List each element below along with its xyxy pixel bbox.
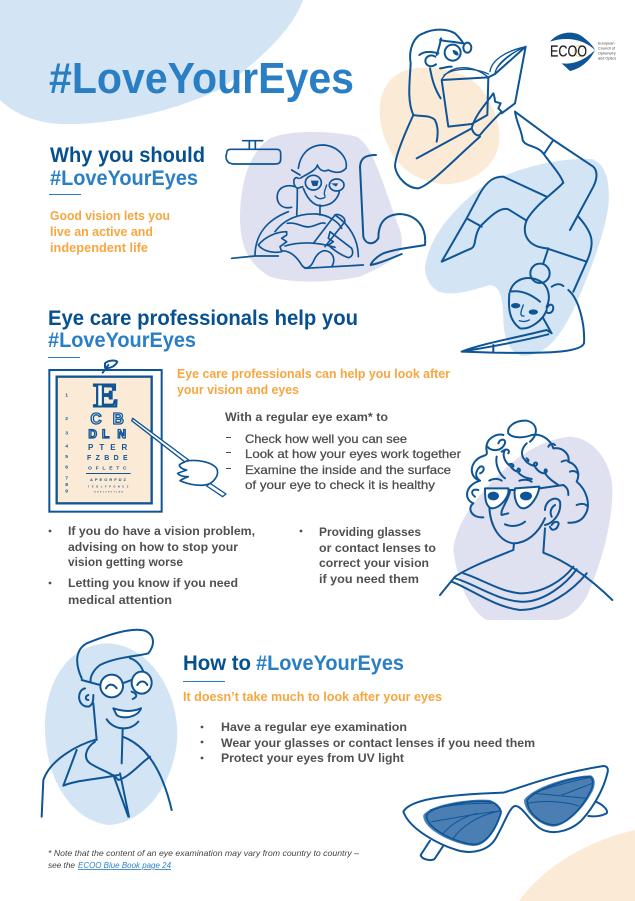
illustration: woman reading [380, 30, 526, 188]
section: eye care professionals [48, 307, 461, 607]
orange text [50, 209, 170, 255]
illustration: eye chart: 3 [65, 431, 68, 437]
orange text: independent life [50, 241, 148, 255]
exam list: of your eye to check it is healthy [245, 478, 435, 492]
illustration: eye chart: E [93, 378, 118, 415]
illustration: eye chart: L [102, 427, 109, 441]
bullet list right: correct your vision [319, 556, 429, 570]
section: why you should [49, 144, 205, 255]
illustration: eye chart: 9 [65, 489, 68, 495]
illustration: eye chart: 1 [65, 393, 68, 399]
logo: ECOO: Optometry [598, 52, 616, 56]
illustration: acrobat [425, 112, 609, 356]
section: how to [183, 652, 535, 765]
illustration: eye chart: 2 [65, 416, 68, 422]
bullet list left: vision getting worse [68, 555, 183, 569]
heading: Why you should [50, 144, 205, 167]
bullet list right: Providing glasses [319, 525, 421, 539]
illustration: sunglasses [403, 766, 608, 860]
illustration: eye chart: D [88, 427, 97, 441]
logo: ECOO: European [598, 42, 614, 46]
bullet list left: advising on how to stop your [68, 540, 238, 554]
illustration: eye chart: N [117, 427, 126, 441]
heading: #LoveYourEyes [256, 652, 404, 675]
illustration: eye chart: OFLETC [88, 465, 127, 471]
orange text: live an active and [50, 225, 153, 239]
bullet list left: Letting you know if you need [68, 576, 238, 590]
illustration: eye chart: B [113, 411, 124, 428]
footnote [48, 848, 359, 870]
orange text: It doesn’t take much to look after your eyes [183, 690, 442, 704]
heading: Eye care professionals help you [48, 307, 358, 330]
heading [48, 307, 358, 352]
orange text [177, 367, 450, 397]
orange text: Eye care professionals can help you look after [177, 367, 450, 381]
exam intro: With a regular eye exam* to [225, 410, 388, 424]
exam list [226, 432, 461, 492]
illustration: eye chart [49, 361, 226, 512]
bullet list: Wear your glasses or contact lenses if you need them [221, 736, 535, 750]
logo: ECOO: and Optics [598, 56, 616, 60]
footnote: see the [48, 860, 75, 870]
logo: ECOO: ECOO [550, 44, 587, 60]
illustration: eye chart: 8 [65, 482, 68, 488]
bullet list: Have a regular eye examination [221, 720, 407, 734]
heading: #LoveYourEyes [48, 329, 196, 352]
illustration: eye chart: 4 [65, 444, 68, 450]
heading [50, 144, 205, 190]
illustration: curly haired woman [440, 421, 612, 620]
illustration: eye chart: 6 [65, 464, 68, 470]
illustration: eye chart: TEOLFPDNEZ [88, 484, 129, 488]
illustration: smiling man [42, 630, 177, 825]
exam list: Examine the inside and the surface [245, 463, 451, 477]
illustration: eye chart: EDFCZPOTLNE [94, 492, 124, 494]
illustration: eye chart: APEORFDZ [90, 477, 127, 482]
illustration: eye chart: 7 [65, 475, 68, 481]
illustration: eye chart: PTER [88, 443, 128, 452]
footnote: * Note that the content of an eye examination may vary from country to country – [48, 848, 359, 858]
background shape: bottom-right peach [519, 830, 635, 901]
illustration: eye chart: FZBDE [87, 455, 128, 462]
bullet list left [49, 524, 255, 607]
title: #LoveYourEyes [49, 54, 354, 103]
heading: #LoveYourEyes [50, 167, 198, 190]
logo: ECOO [550, 33, 616, 71]
heading: How to [183, 652, 251, 675]
orange text: your vision and eyes [177, 383, 299, 397]
illustration: eye chart: 5 [65, 454, 68, 460]
bullet list: Protect your eyes from UV light [221, 751, 404, 765]
heading [183, 652, 404, 675]
illustration: driver [226, 132, 425, 282]
exam list: Look at how your eyes work together [245, 447, 461, 461]
exam list: Check how well you can see [245, 432, 407, 446]
illustration: eye chart: C [90, 411, 102, 428]
pointer and hand [132, 418, 226, 497]
bullet list left: medical attention [68, 593, 172, 607]
footnote: ECOO Blue Book page 24 [78, 860, 171, 870]
background shape: top-left blue [0, 0, 303, 124]
bullet list right: or contact lenses to [319, 541, 436, 555]
bullet list [201, 720, 535, 765]
logo: ECOO: Council of [598, 46, 616, 50]
bullet list right: if you need them [319, 572, 419, 586]
bullet list left: If you do have a vision problem, [68, 524, 255, 538]
orange text: Good vision lets you [50, 209, 170, 223]
bullet list right [300, 525, 436, 586]
